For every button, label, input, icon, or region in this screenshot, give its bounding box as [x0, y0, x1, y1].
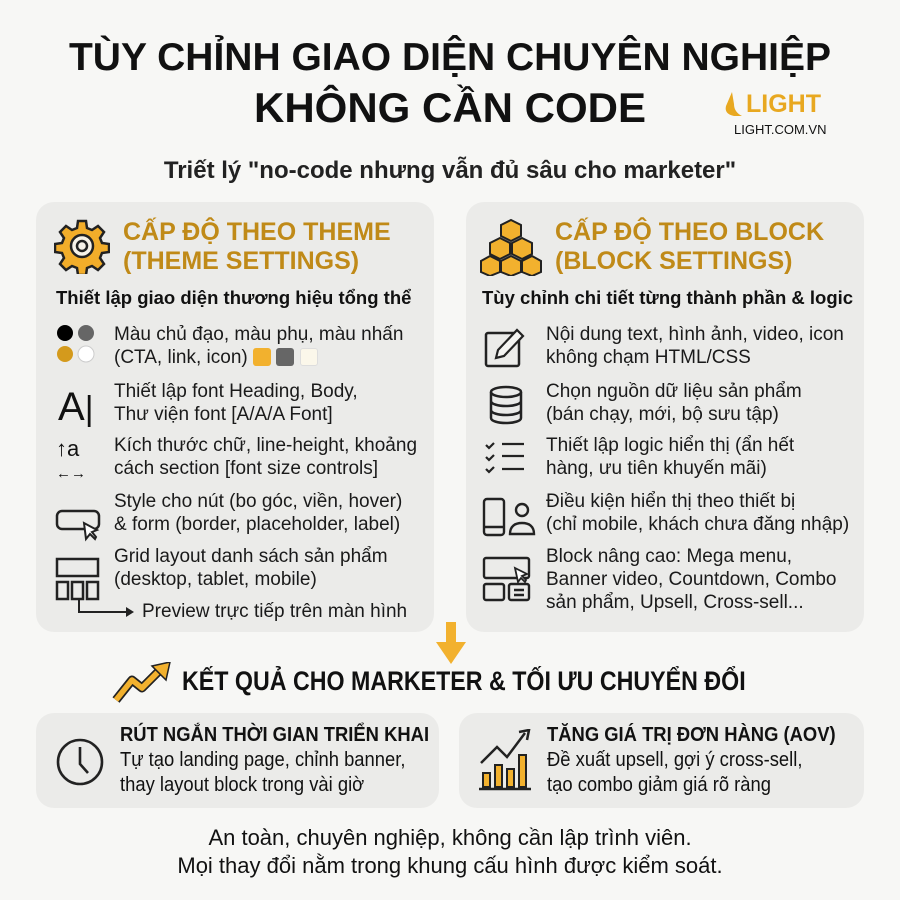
text: preview: Preview trực tiếp trên màn hình	[142, 601, 407, 622]
icon: size	[56, 436, 86, 482]
text: device: (chỉ mobile, khách chưa đăng nhập)	[546, 514, 849, 535]
text: font: Thư viện font [A/A/A Font]	[114, 404, 333, 425]
text: device: Điều kiện hiển thị theo thiết bị	[546, 491, 795, 512]
panel: block settings	[466, 202, 864, 632]
text: data	[546, 381, 802, 425]
text: aov: TĂNG GIÁ TRỊ ĐƠN HÀNG (AOV)	[547, 724, 836, 746]
text: grid: (desktop, tablet, mobile)	[114, 569, 317, 590]
icon: trend arrow	[112, 662, 171, 703]
icon: grid	[56, 558, 100, 600]
text: content: không chạm HTML/CSS	[546, 347, 751, 368]
results heading	[112, 662, 746, 703]
text: data: (bán chạy, mới, bộ sưu tập)	[546, 404, 779, 425]
icon: gear	[54, 220, 110, 274]
text: advanced: Banner video, Countdown, Combo	[546, 569, 836, 590]
icon: device user	[482, 498, 536, 536]
icon: size: ↑a	[56, 436, 79, 461]
footer text: An toàn, chuyên nghiệp, không cần lập trình viên.	[208, 825, 692, 850]
heading: (THEME SETTINGS)	[123, 247, 359, 275]
title	[69, 35, 831, 131]
logo	[726, 90, 826, 137]
text: time: Tự tạo landing page, chỉnh banner,	[120, 749, 405, 771]
text: colors: (CTA, link, icon)	[114, 347, 248, 368]
panel: time	[36, 713, 439, 808]
icon: edit	[484, 328, 524, 368]
heading	[123, 217, 391, 275]
text: logic	[546, 435, 794, 479]
subheading: Thiết lập giao diện thương hiệu tổng thể	[56, 287, 411, 308]
text: aov: Đề xuất upsell, gợi ý cross-sell,	[547, 749, 802, 771]
icon: bar chart	[479, 729, 531, 790]
results heading: KẾT QUẢ CHO MARKETER & TỐI ƯU CHUYỂN ĐỔI	[182, 666, 746, 696]
text: colors: Màu chủ đạo, màu phụ, màu nhấn	[114, 324, 403, 345]
text: button: Style cho nút (bo góc, viền, hover)	[114, 491, 402, 512]
heading: CẤP ĐỘ THEO BLOCK	[555, 218, 824, 246]
title: KHÔNG CẦN CODE	[254, 84, 646, 131]
icon: advanced block	[482, 556, 530, 602]
text: advanced	[546, 546, 836, 613]
text: grid	[114, 546, 388, 590]
subheading: Tùy chỉnh chi tiết từng thành phần & logic	[482, 287, 853, 308]
text: advanced: Block nâng cao: Mega menu,	[546, 546, 792, 567]
text: time	[120, 722, 429, 796]
text: button	[114, 491, 402, 535]
arrow: preview	[78, 600, 134, 617]
text: aov	[547, 723, 836, 796]
text: size: Kích thước chữ, line-height, khoảng	[114, 435, 417, 456]
panel: aov	[459, 713, 864, 808]
text: advanced: sản phẩm, Upsell, Cross-sell...	[546, 592, 804, 613]
heading	[555, 217, 824, 275]
text: content	[546, 324, 844, 368]
icon: clock	[56, 738, 104, 786]
heading: (BLOCK SETTINGS)	[555, 247, 792, 275]
arrow: down	[436, 622, 466, 664]
text: time: thay layout block trong vài giờ	[120, 774, 364, 796]
icon: button	[56, 510, 100, 542]
text: logic: Thiết lập logic hiển thị (ẩn hết	[546, 435, 794, 456]
text: content: Nội dung text, hình ảnh, video, icon	[546, 324, 844, 345]
text: font	[114, 381, 358, 425]
panel: theme settings	[36, 202, 434, 632]
text: data: Chọn nguồn dữ liệu sản phẩm	[546, 381, 802, 402]
text: aov: tạo combo giảm giá rõ ràng	[547, 774, 771, 796]
logo: LIGHT	[746, 90, 821, 118]
subtitle: Triết lý "no-code nhưng vẫn đủ sâu cho marketer"	[164, 157, 736, 184]
text: size	[114, 435, 417, 479]
logo: LIGHT.COM.VN	[734, 122, 826, 137]
text: device	[546, 491, 849, 535]
icon: font: A|	[58, 385, 94, 429]
text: logic: hàng, ưu tiên khuyến mãi)	[546, 458, 767, 479]
text: grid: Grid layout danh sách sản phẩm	[114, 546, 388, 567]
icon: database	[490, 386, 522, 424]
footer text	[177, 825, 723, 878]
icon: checklist	[485, 442, 524, 474]
icon: cubes	[480, 218, 542, 276]
heading: CẤP ĐỘ THEO THEME	[123, 218, 391, 246]
text: colors	[114, 324, 403, 368]
text: font: Thiết lập font Heading, Body,	[114, 381, 358, 402]
footer text: Mọi thay đổi nằm trong khung cấu hình được kiểm soát.	[177, 853, 723, 878]
title: TÙY CHỈNH GIAO DIỆN CHUYÊN NGHIỆP	[69, 36, 831, 79]
text: button: & form (border, placeholder, label)	[114, 514, 400, 535]
icon: size: ←→	[56, 465, 86, 482]
icon: color dots	[57, 325, 94, 362]
text: time: RÚT NGẮN THỜI GIAN TRIỂN KHAI	[120, 724, 429, 746]
text: size: cách section [font size controls]	[114, 458, 378, 479]
